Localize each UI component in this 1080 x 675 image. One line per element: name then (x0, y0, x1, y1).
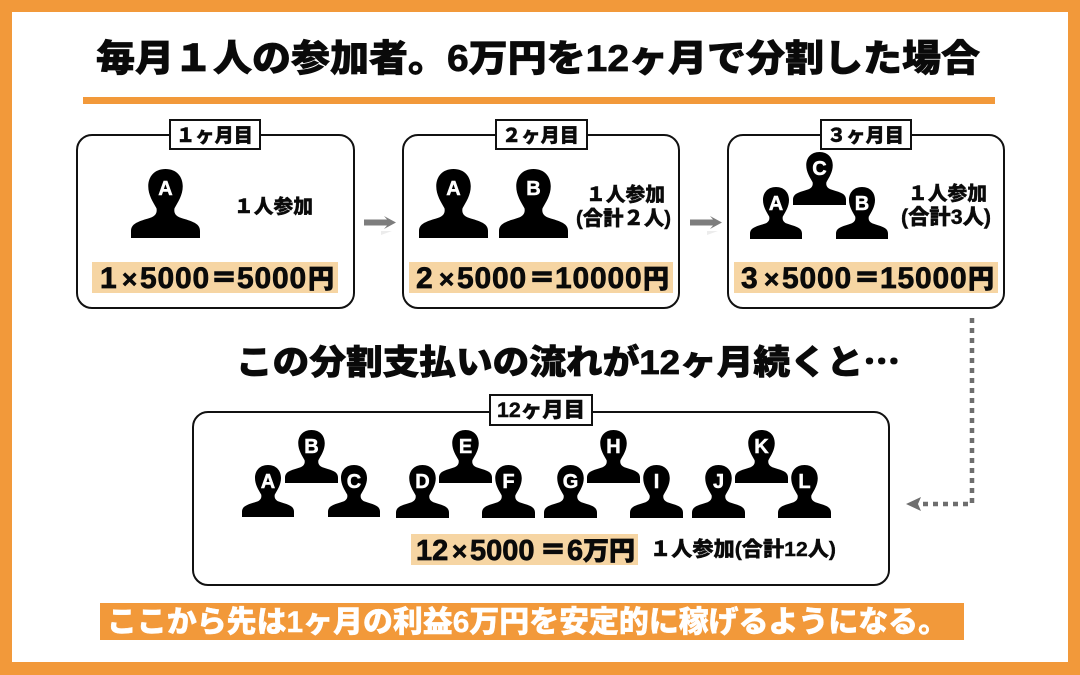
person C (793, 152, 846, 205)
calculation highlight: 6 (567, 535, 583, 567)
calculation highlight: 1 (100, 262, 117, 295)
panel: month 1 (77, 120, 354, 308)
person B (836, 187, 888, 239)
group J K L: K (754, 436, 769, 458)
calculation highlight (411, 534, 638, 567)
calculation highlight: ＝ (540, 535, 566, 565)
calculation highlight: ＝ (854, 263, 880, 293)
calculation highlight: 5000 (237, 262, 307, 295)
calculation highlight: 10000 (555, 262, 642, 295)
calculation highlight: 5000 (140, 262, 210, 295)
participant note: (合計２人) (576, 207, 671, 230)
title underline (83, 97, 995, 104)
group D E F: D (415, 471, 430, 493)
group D E F: E (459, 436, 472, 458)
group D E F: F (502, 471, 515, 493)
calculation highlight: 5000 (457, 262, 527, 295)
person A: A (446, 178, 461, 200)
conclusion banner: ここから先は1ヶ月の利益6万円を安定的に稼げるようになる。 (107, 606, 948, 639)
calculation highlight: 万円 (583, 536, 635, 566)
panel: month 3 (728, 120, 1004, 308)
participant note: １人参加 (586, 184, 665, 206)
calculation highlight: 5000 (470, 535, 535, 567)
calculation highlight: 12 (416, 535, 448, 567)
participant note (576, 184, 671, 230)
month 12 tag (490, 395, 592, 425)
calculation highlight: ＝ (211, 263, 237, 293)
month 2 tag: ２ヶ月目 (502, 125, 579, 147)
calculation highlight: × (764, 264, 779, 294)
month 1 tag (170, 120, 260, 149)
person B: B (526, 178, 541, 200)
group G H I: I (654, 471, 659, 493)
calculation highlight: 5000 (782, 262, 852, 295)
person A (750, 187, 802, 239)
group J K L: J (713, 471, 724, 493)
month 12 tag: 12ヶ月目 (497, 399, 585, 422)
arrow: month 1 to 2 (364, 216, 396, 235)
month 3 tag (821, 120, 911, 149)
person B (499, 169, 568, 238)
calculation highlight (409, 262, 673, 295)
month 2 tag (496, 120, 587, 149)
calculation highlight: 3 (741, 262, 758, 295)
person B: B (855, 193, 869, 215)
person C: C (812, 158, 827, 180)
month 3 tag: ３ヶ月目 (827, 125, 904, 147)
person A (419, 169, 488, 238)
calculation highlight: 2 (416, 262, 433, 295)
person A (131, 169, 200, 238)
calculation highlight: × (452, 536, 467, 566)
calculation highlight: 円 (968, 264, 994, 294)
group G H I: G (563, 471, 578, 493)
calculation highlight (92, 262, 338, 295)
group J K L (692, 430, 831, 518)
participant note: (合計3人) (901, 206, 991, 229)
person A: A (769, 193, 783, 215)
participant note: １人参加 (908, 183, 987, 205)
panel: month 2 (403, 120, 679, 308)
dotted arrow: month 3 to month 12 (906, 318, 972, 511)
group G H I: H (606, 436, 621, 458)
participant note (901, 183, 991, 229)
calculation highlight: × (122, 264, 137, 294)
calculation highlight: ＝ (529, 263, 555, 293)
calculation highlight: 円 (643, 264, 669, 294)
group A B C: C (347, 471, 361, 493)
panel: month 12 (193, 395, 889, 585)
group A B C (242, 430, 380, 517)
participant note: １人参加 (234, 196, 313, 218)
group J K L: L (798, 471, 811, 493)
title: 毎月１人の参加者。6万円を12ヶ月で分割した場合 (96, 38, 980, 79)
arrow: month 2 to 3 (690, 216, 722, 235)
month 1 tag: １ヶ月目 (176, 125, 253, 147)
participant note: １人参加(合計12人) (650, 538, 836, 561)
group A B C: B (304, 436, 319, 458)
calculation highlight (734, 262, 998, 295)
group G H I (544, 430, 683, 518)
group A B C: A (261, 471, 275, 493)
subheading: この分割支払いの流れが12ヶ月続くと … (236, 335, 900, 384)
person A: A (158, 178, 173, 200)
calculation highlight: 円 (308, 264, 334, 294)
group D E F (396, 430, 535, 518)
calculation highlight: 15000 (880, 262, 967, 295)
calculation highlight: × (439, 264, 454, 294)
